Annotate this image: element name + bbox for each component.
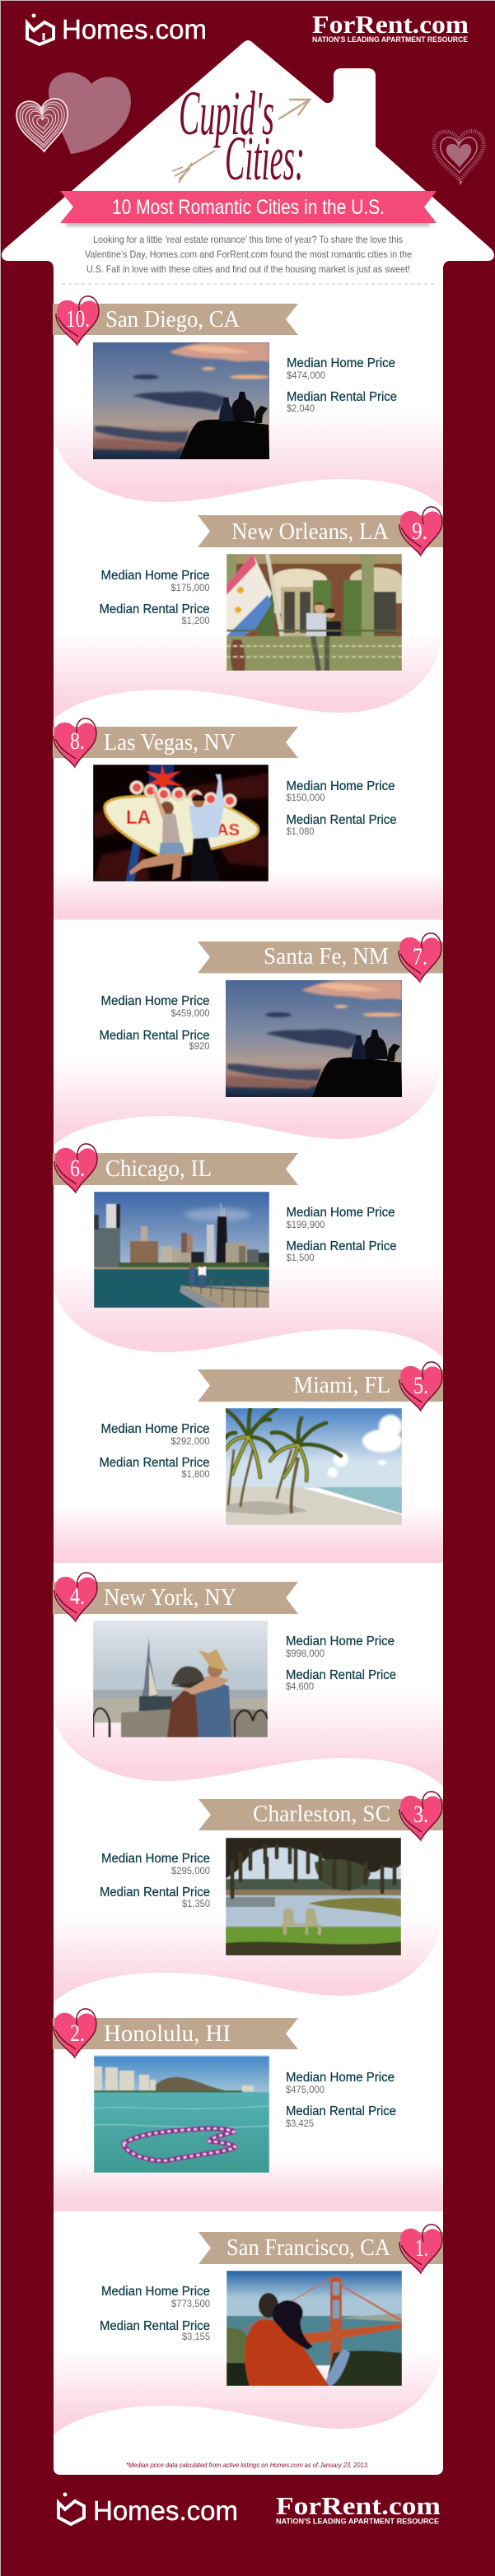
heart badge bbox=[399, 933, 441, 983]
icon: Homes house bbox=[58, 2492, 84, 2524]
city name: Chicago, IL bbox=[105, 1155, 212, 1182]
rank number: 2. bbox=[70, 2020, 85, 2047]
photo: New Orleans balcony bbox=[226, 554, 402, 671]
price stats bbox=[99, 569, 210, 626]
banner bbox=[53, 1153, 298, 1185]
price stats: Median Home Price bbox=[287, 356, 395, 370]
price stats: $773,500 bbox=[171, 2298, 210, 2309]
pink band: section 2 bbox=[54, 2142, 443, 2211]
banner bbox=[198, 515, 443, 547]
pink wave: section 6 bbox=[54, 1237, 443, 1358]
price stats: Median Home Price bbox=[100, 1422, 209, 1436]
price stats: $3,425 bbox=[286, 2118, 314, 2129]
rank number: 9. bbox=[412, 518, 427, 545]
rank number: 5. bbox=[413, 1372, 428, 1399]
price stats: $1,080 bbox=[287, 825, 315, 837]
photo: Golden Gate couple bbox=[226, 2271, 402, 2386]
price stats: $4,600 bbox=[286, 1681, 314, 1692]
photo: Las Vegas sign couple: AS bbox=[217, 821, 240, 839]
banner bbox=[198, 2232, 443, 2264]
price stats: $1,800 bbox=[181, 1468, 210, 1480]
photo: Las Vegas sign couple bbox=[93, 765, 269, 881]
price stats: Median Home Price bbox=[100, 994, 209, 1008]
tagline: NATION'S LEADING APARTMENT RESOURCE bbox=[276, 2517, 439, 2527]
heart badge bbox=[56, 296, 99, 346]
price stats bbox=[99, 994, 210, 1052]
pink wave: section 10 bbox=[54, 387, 443, 508]
subtitle ribbon bbox=[60, 191, 437, 226]
pink wave: section 9 bbox=[54, 611, 443, 719]
photo: New York rooftop couple bbox=[93, 1620, 268, 1737]
logo: ForRent.com bottom bbox=[276, 2491, 441, 2527]
arrow: lower bbox=[172, 151, 215, 183]
price stats: $295,000 bbox=[171, 1865, 210, 1876]
price stats: Median Home Price bbox=[287, 1206, 395, 1220]
price stats: $474,000 bbox=[287, 370, 325, 381]
heart badge bbox=[399, 1362, 442, 1412]
price stats: Median Home Price bbox=[101, 2285, 210, 2299]
price stats bbox=[99, 1422, 210, 1480]
heart badge bbox=[54, 1573, 97, 1623]
section: 9 New Orleans bbox=[99, 507, 443, 671]
price stats: Median Home Price bbox=[101, 1852, 210, 1866]
banner bbox=[53, 2018, 298, 2049]
icon: Homes house bbox=[27, 13, 54, 44]
price stats: $1,200 bbox=[181, 615, 210, 626]
pink band: section 5 bbox=[54, 1490, 443, 1563]
heart badge bbox=[54, 2009, 96, 2059]
icon: scribbled heart bbox=[15, 97, 72, 154]
price stats: $175,000 bbox=[171, 582, 210, 593]
price stats: Median Home Price bbox=[287, 779, 395, 793]
rank number: 6. bbox=[70, 1155, 85, 1182]
price stats: Median Home Price bbox=[286, 1634, 395, 1648]
rank number: 10. bbox=[66, 305, 90, 332]
price stats bbox=[287, 779, 397, 837]
city name: San Francisco, CA bbox=[226, 2234, 390, 2261]
price stats: Median Home Price bbox=[286, 2071, 395, 2085]
price stats: $475,000 bbox=[286, 2084, 325, 2095]
intro text bbox=[85, 234, 412, 275]
section: 3 Charleston bbox=[100, 1792, 443, 1955]
ribbon text: 10 Most Romantic Cities in the U.S. bbox=[112, 196, 385, 219]
price stats: $2,040 bbox=[287, 402, 315, 414]
rank number: 3. bbox=[413, 1801, 428, 1828]
section: 5 Miami bbox=[99, 1362, 443, 1525]
photo: Charleston lake chairs bbox=[226, 1838, 401, 1955]
price stats: Median Rental Price bbox=[100, 1886, 210, 1899]
pink band: section 8 bbox=[54, 856, 443, 920]
banner bbox=[198, 942, 443, 973]
pink wave: section 3 bbox=[54, 1894, 443, 2002]
price stats bbox=[286, 1634, 396, 1692]
wordmark: ForRent.com bbox=[312, 10, 469, 39]
heart badge bbox=[399, 2225, 442, 2275]
logo: Homes.com top bbox=[27, 13, 207, 44]
price stats: Median Rental Price bbox=[286, 1668, 396, 1682]
city name: Las Vegas, NV bbox=[104, 729, 236, 756]
intro text: U.S. Fall in love with these cities and find out if the housing market is just as sweet! bbox=[86, 263, 410, 275]
price stats bbox=[100, 2285, 210, 2342]
logo: Homes.com bottom bbox=[58, 2492, 238, 2526]
price stats: $1,350 bbox=[182, 1898, 210, 1909]
pink wave: section 7 bbox=[54, 1037, 443, 1146]
price stats: Median Rental Price bbox=[99, 1456, 209, 1470]
section: 7 Santa Fe bbox=[99, 933, 443, 1097]
banner bbox=[53, 304, 298, 335]
price stats bbox=[287, 1206, 397, 1263]
price stats: Median Rental Price bbox=[287, 813, 397, 827]
pink wave: section 4 bbox=[54, 1666, 443, 1787]
heart badge bbox=[54, 1144, 97, 1194]
price stats: Median Rental Price bbox=[287, 1239, 397, 1253]
rank number: 8. bbox=[70, 728, 85, 755]
icon: large pale heart bbox=[49, 72, 131, 154]
rank number: 1. bbox=[415, 2234, 428, 2262]
arrow: upper bbox=[278, 100, 310, 119]
title: Cupid's Cities: Cupid's bbox=[179, 79, 274, 148]
wordmark: Homes.com bbox=[93, 2495, 238, 2526]
price stats: $459,000 bbox=[171, 1007, 210, 1019]
photo: Honolulu lei on water bbox=[94, 2055, 269, 2173]
section: 10 San Diego bbox=[53, 296, 397, 459]
photo: Chicago skyline bbox=[94, 1192, 269, 1308]
price stats bbox=[287, 356, 397, 414]
price stats: Median Rental Price bbox=[99, 1029, 209, 1043]
tagline: NATION'S LEADING APARTMENT RESOURCE bbox=[312, 35, 468, 44]
city name: New York, NY bbox=[104, 1584, 236, 1611]
text: Cities: bbox=[225, 124, 305, 193]
photo: Las Vegas sign couple: LA bbox=[126, 807, 151, 829]
intro text: Valentine’s Day, Homes.com and ForRent.com found the most romantic cities in the bbox=[85, 249, 412, 260]
rank number: 7. bbox=[413, 943, 427, 970]
city name: Santa Fe, NM bbox=[264, 943, 389, 969]
icon: spiked heart bbox=[434, 131, 483, 181]
price stats bbox=[100, 1852, 210, 1909]
rank number: 4. bbox=[70, 1583, 85, 1610]
price stats: Median Rental Price bbox=[286, 2104, 396, 2118]
price stats: $1,500 bbox=[287, 1252, 315, 1263]
price stats: $199,900 bbox=[287, 1219, 325, 1230]
city name: New Orleans, LA bbox=[231, 518, 389, 545]
banner bbox=[198, 1369, 443, 1402]
section: 6 Chicago bbox=[53, 1144, 397, 1308]
price stats: Median Home Price bbox=[100, 569, 209, 583]
section: 2 Honolulu bbox=[53, 2009, 396, 2173]
price stats: $920 bbox=[189, 1040, 210, 1052]
price stats: Median Rental Price bbox=[100, 2319, 210, 2333]
wordmark: Homes.com bbox=[62, 14, 207, 44]
city name: San Diego, CA bbox=[105, 306, 240, 332]
photo: sunset couple bbox=[93, 342, 269, 459]
price stats: $3,155 bbox=[182, 2331, 210, 2342]
photo: sunset couple bbox=[226, 980, 402, 1097]
price stats: Median Rental Price bbox=[287, 390, 397, 404]
ribbon shape bbox=[60, 191, 437, 223]
pink wave: section 1 bbox=[54, 2327, 443, 2435]
price stats: $150,000 bbox=[287, 792, 325, 803]
section: 4 New York bbox=[53, 1573, 396, 1737]
price stats: Median Rental Price bbox=[99, 602, 209, 616]
banner bbox=[53, 727, 298, 758]
section: 8 Las Vegas bbox=[53, 718, 397, 881]
footnote: *Median price data calculated from active listings on Homes.com as of January 23, 2013. bbox=[126, 2461, 369, 2469]
banner bbox=[198, 1799, 443, 1830]
price stats bbox=[286, 2071, 396, 2129]
city name: Charleston, SC bbox=[253, 1801, 390, 1827]
title: Cupid's Cities bbox=[179, 79, 305, 193]
wordmark: ForRent.com bbox=[276, 2491, 441, 2520]
ribbon shadow bbox=[66, 221, 430, 226]
city name: Miami, FL bbox=[293, 1372, 390, 1398]
city name: Honolulu, HI bbox=[104, 2020, 231, 2047]
price stats: $998,000 bbox=[286, 1648, 325, 1659]
price stats: $292,000 bbox=[171, 1435, 210, 1447]
heart badge bbox=[399, 507, 442, 557]
banner bbox=[53, 1582, 298, 1614]
heart badge bbox=[399, 1792, 442, 1842]
section: 1 San Francisco bbox=[100, 2225, 443, 2386]
intro text: Looking for a little ‘real estate romance’ this time of year? To share the love this bbox=[93, 234, 403, 245]
heart badge bbox=[54, 718, 96, 769]
photo: Miami beach palms bbox=[226, 1408, 402, 1525]
logo: ForRent.com top bbox=[312, 10, 469, 44]
